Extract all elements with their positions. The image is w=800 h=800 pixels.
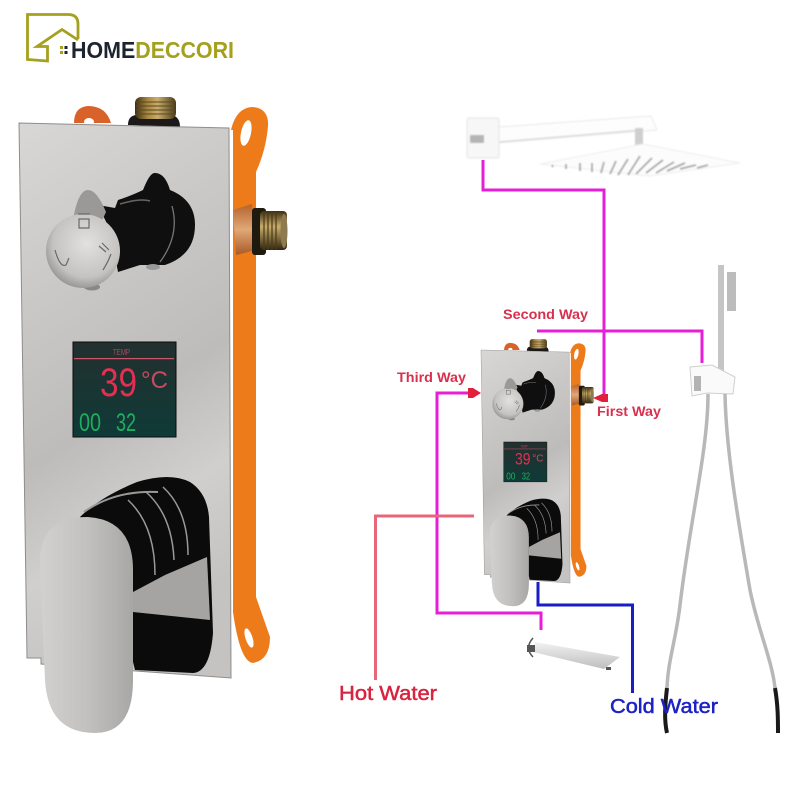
line: second way <box>537 331 702 363</box>
logo wordmark: HOMEDECCORI <box>71 37 234 63</box>
wall arm <box>498 116 657 143</box>
brass top outlet <box>128 97 180 127</box>
line: first way <box>483 160 604 394</box>
label: first way: First Way <box>597 403 661 419</box>
tub spout diagram <box>527 638 620 670</box>
LCD display <box>73 342 176 437</box>
shower head bar <box>727 272 736 311</box>
temperature reading: 39 <box>100 361 137 405</box>
wall plate <box>467 118 499 158</box>
brass side outlet <box>233 204 288 255</box>
temperature knob <box>46 190 120 288</box>
logo: HomeDeccori <box>28 14 234 63</box>
left hose <box>667 394 708 688</box>
connection lines <box>376 160 702 693</box>
line: cold water <box>538 582 632 693</box>
mixer lever body <box>80 477 213 673</box>
shower head diagram <box>467 116 740 176</box>
rain head <box>540 144 740 176</box>
small mixer valve in diagram <box>481 339 594 606</box>
degree unit: °C <box>141 367 168 394</box>
orange mounting frame <box>74 106 270 663</box>
green flow reading: 32 <box>116 409 136 437</box>
wall bracket <box>690 365 735 396</box>
label: hot water: Hot Water <box>339 683 437 705</box>
icon: house outline <box>28 14 78 61</box>
icon: knob markings <box>55 214 111 270</box>
hand shower diagram <box>665 265 778 733</box>
thermostat black body <box>84 173 195 290</box>
label: second way: Second Way <box>503 306 588 322</box>
right hose <box>725 394 775 688</box>
label: cold water: Cold Water <box>610 696 718 718</box>
line: third way <box>437 393 541 630</box>
icon: window dots <box>60 46 68 54</box>
shower handle <box>718 265 724 373</box>
line: hot water <box>376 516 474 680</box>
large mixer valve product photo <box>19 97 288 733</box>
brushed metal plate <box>19 123 231 678</box>
arrow: first way <box>593 394 608 402</box>
arm connector <box>635 128 643 145</box>
top display label: TEMP <box>113 348 130 357</box>
oval lever handle <box>40 517 133 733</box>
label: third way: Third Way <box>397 369 466 385</box>
arrow: third way <box>468 388 481 398</box>
green time reading: 00 <box>79 409 101 437</box>
